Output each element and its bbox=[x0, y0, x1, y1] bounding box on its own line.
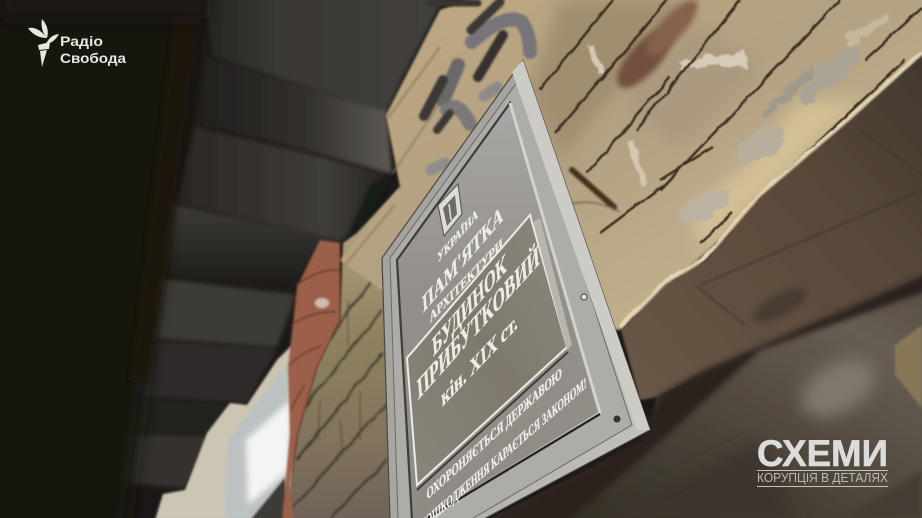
logo wordmark: Свобода bbox=[60, 50, 126, 66]
lower masonry in shadow bbox=[470, 270, 922, 518]
bottom panel edge bbox=[417, 352, 568, 490]
date: кін. XIX ст.: кін. ХІХ ст. bbox=[440, 306, 518, 412]
plaque outer frame bbox=[382, 60, 650, 518]
icon: torch with wing leaves bbox=[28, 19, 59, 67]
notice line one: ОХОРОНЯЄТЬСЯ ДЕРЖАВОЮ bbox=[426, 365, 563, 504]
bottom rule bbox=[757, 486, 888, 487]
Ukrainian coat of arms bbox=[438, 184, 462, 236]
panel highlight bevel bbox=[425, 103, 600, 518]
screw top right bbox=[581, 294, 587, 300]
title: будинок: БУДИНОК bbox=[431, 247, 507, 363]
brick wall, bright upper section bbox=[340, 0, 922, 330]
top rule bbox=[757, 470, 888, 471]
underside of brick ledge bbox=[621, 48, 922, 400]
building number 35 bbox=[424, 2, 530, 170]
rusty rebar anchor bbox=[571, 170, 620, 212]
plaque inner step bbox=[390, 78, 632, 518]
logo wordmark: Радіо bbox=[60, 33, 103, 49]
centre panel shadow edge bbox=[533, 218, 572, 350]
brick wall, lower left bbox=[285, 187, 400, 518]
memorial plaque bbox=[382, 60, 650, 518]
plaque lettering bbox=[416, 199, 587, 518]
window frame and glass bbox=[155, 345, 292, 518]
plaque right bevel bbox=[512, 60, 650, 430]
drainpipe bbox=[282, 240, 340, 518]
plaque upper recessed panel bbox=[397, 103, 600, 518]
screw bottom right bbox=[614, 416, 620, 422]
ceiling beams bbox=[110, 0, 445, 518]
centre recessed panel bbox=[407, 215, 567, 485]
heading: пам'ятка: ПАМ'ЯТКА bbox=[421, 199, 504, 318]
wordmark: СХЕМИ bbox=[757, 433, 888, 474]
tagline: КОРУПЦІЯ В ДЕТАЛЯХ bbox=[757, 471, 889, 485]
logo: Radio Svoboda bbox=[28, 19, 126, 67]
logo wordmark bbox=[60, 33, 126, 66]
dark foreground pillar bbox=[0, 0, 205, 518]
plaque lower edge shadow bbox=[426, 414, 600, 518]
heading: Україна: УКРАЇНА bbox=[437, 205, 479, 266]
logo: Skhemy bbox=[757, 433, 889, 487]
heading: архітектури: АРХІТЕКТУРИ bbox=[429, 235, 503, 327]
title: прибутковий: ПРИБУТКОВИЙ bbox=[416, 239, 540, 407]
